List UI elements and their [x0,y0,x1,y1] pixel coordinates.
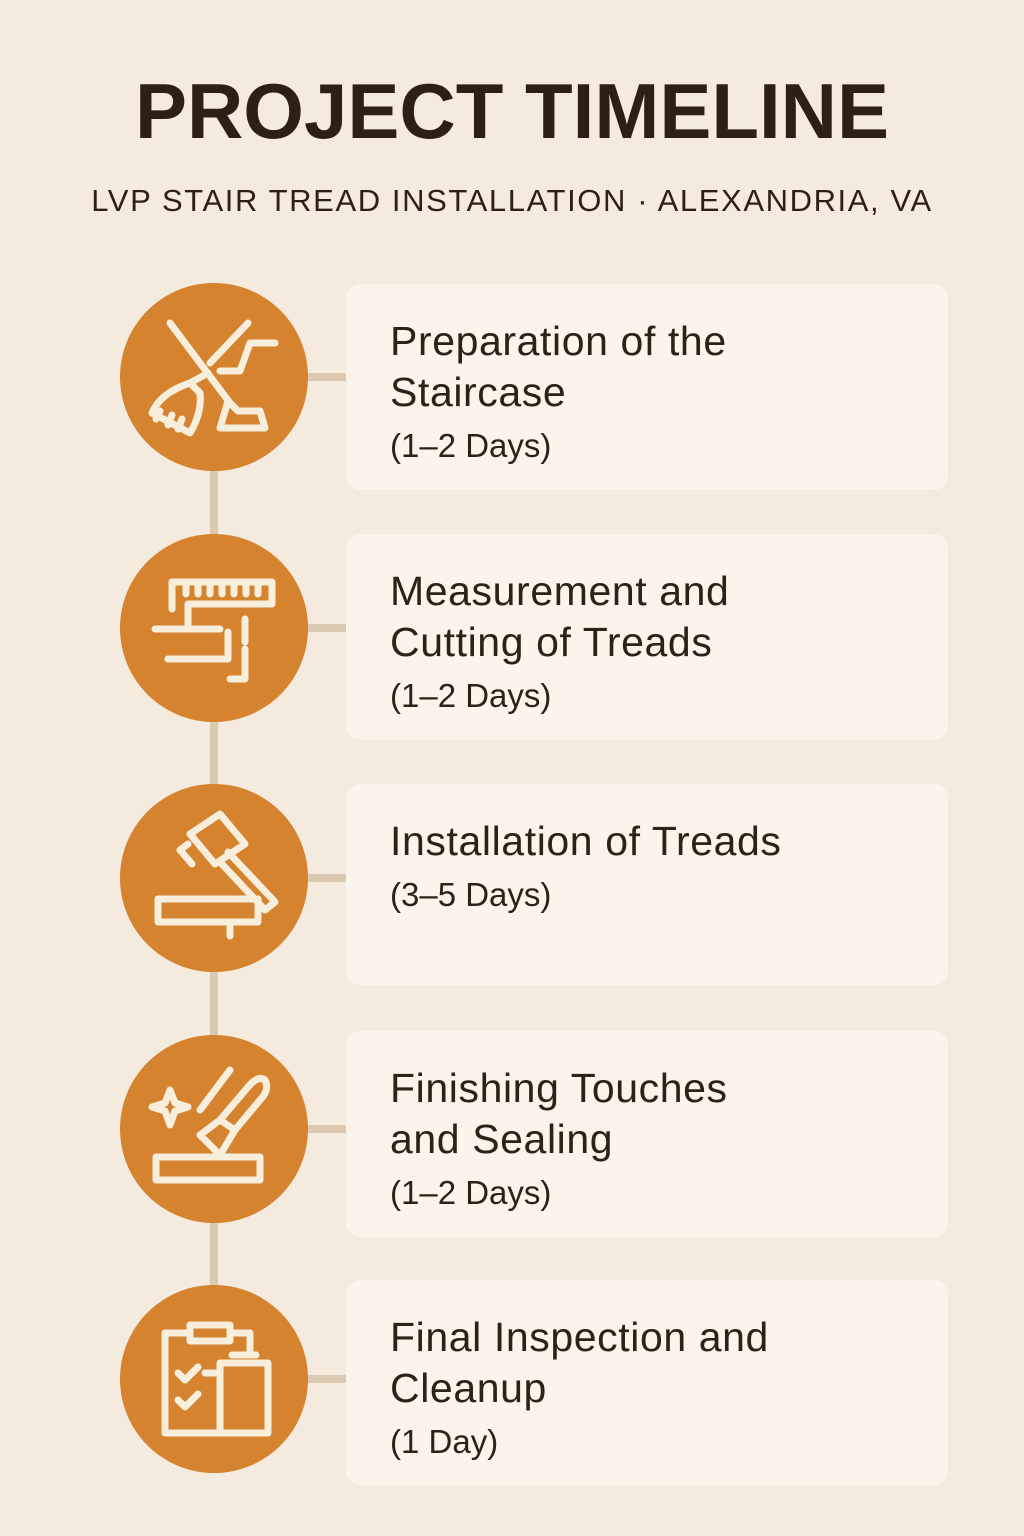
card: step 3 [346,784,948,985]
card: step 4: Finishing Touches [390,1065,728,1111]
timeline line [210,377,218,1379]
card: step 4: and Sealing [390,1116,613,1162]
card: step 5 [346,1280,948,1485]
card: step 4 [346,1031,948,1237]
card: step 2: (1–2 Days) [390,677,551,714]
card: step 4: (1–2 Days) [390,1174,551,1211]
card: step 3: Installation of Treads [390,818,782,864]
icon: hammer [120,784,308,972]
card: step 1: Staircase [390,369,566,415]
card: step 1: Preparation of the [390,318,727,364]
card: step 2 [346,534,948,740]
icon: brush and sparkle [120,1035,308,1223]
card: step 1: (1–2 Days) [390,427,551,464]
icon: clipboard checklist [120,1285,308,1473]
card: step 5: (1 Day) [390,1423,498,1460]
icon: ruler and square [120,534,308,722]
card: step 2: Cutting of Treads [390,619,712,665]
card: step 5: Cleanup [390,1365,547,1411]
icon: broom and mop [120,283,308,471]
subtitle: LVP STAIR TREAD INSTALLATION · ALEXANDRIA, VA [91,183,933,218]
title: PROJECT TIMELINE [135,67,889,155]
card: step 1 [346,284,948,490]
card: step 2: Measurement and [390,568,729,614]
card: step 3: (3–5 Days) [390,876,551,913]
card: step 5: Final Inspection and [390,1314,769,1360]
